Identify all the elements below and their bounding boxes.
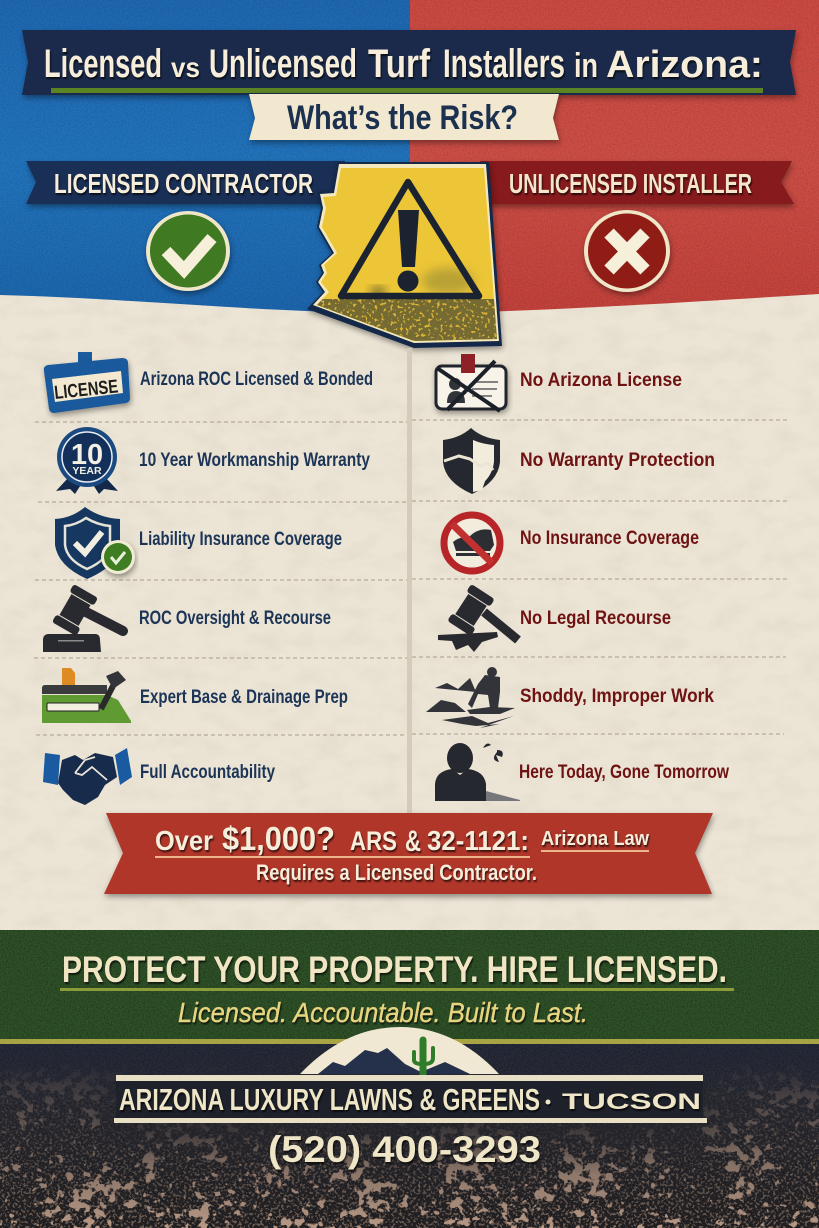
tagline: Licensed. Accountable. Built to Last. <box>178 997 588 1028</box>
icon: Arizona warning state shape <box>300 162 502 348</box>
background: licensed blue half <box>0 0 410 330</box>
row 4 text: ROC Oversight & Recourse <box>139 608 331 629</box>
title banner <box>22 30 796 95</box>
phone number: (520) 400-3293 <box>268 1129 541 1170</box>
icon: turf base preparation <box>42 668 131 723</box>
icon: ten year warranty ribbon <box>56 427 118 494</box>
law ribbon text <box>155 820 649 885</box>
law ribbon <box>104 813 713 894</box>
row 3 text: Liability Insurance Coverage <box>139 529 342 550</box>
row 6 text: Here Today, Gone Tomorrow <box>519 762 729 783</box>
icon: gavel <box>43 584 123 652</box>
icon: license card: LICENSE <box>53 376 119 404</box>
icon: handshake <box>43 748 132 805</box>
call to action green band <box>0 930 819 1040</box>
panel: unlicensed risks <box>426 354 729 801</box>
unlicensed installer banner <box>480 161 794 204</box>
row 1 text: No Arizona License <box>520 370 682 391</box>
company name block <box>114 1075 707 1123</box>
row dividers <box>34 420 790 735</box>
title text: Arizona: <box>606 44 763 86</box>
law ribbon text: Over <box>155 825 213 856</box>
law ribbon text: ARS <box>350 826 397 856</box>
company name: TUCSON <box>562 1089 701 1114</box>
center divider <box>407 348 412 815</box>
warning triangle <box>341 182 479 296</box>
licensed contractor banner <box>26 161 345 204</box>
icon: no insurance sign <box>444 515 500 571</box>
icon: shoddy work scene <box>426 667 515 728</box>
icon: crossed-out license card <box>436 354 506 411</box>
icon: vanishing person <box>435 743 520 801</box>
subtitle ribbon <box>249 94 559 140</box>
law ribbon text: Arizona Law <box>541 828 649 850</box>
logo: dome, mountains and cactus <box>300 1027 499 1076</box>
title text: Turf <box>368 42 431 86</box>
row 5 text: Shoddy, Improper Work <box>520 686 714 707</box>
panel: licensed benefits <box>42 352 373 805</box>
licensed heading: LICENSED CONTRACTOR <box>54 168 313 199</box>
footer asphalt <box>0 1040 819 1228</box>
row 2 text: 10 Year Workmanship Warranty <box>139 450 370 471</box>
icon: insurance shield with check <box>55 507 135 579</box>
icon: green check badge <box>146 211 230 291</box>
law ribbon text: 32-1121: <box>427 825 529 856</box>
title text: Licensed <box>44 42 162 86</box>
row 1 text: Arizona ROC Licensed & Bonded <box>140 369 373 390</box>
title text: Installers <box>443 42 565 86</box>
title text: Unlicensed <box>209 42 357 86</box>
row 2 text: No Warranty Protection <box>520 450 715 471</box>
background: unlicensed red half <box>410 0 819 330</box>
icon: ten year warranty ribbon: 10 <box>71 439 103 471</box>
row 5 text: Expert Base & Drainage Prep <box>140 687 348 708</box>
title text: in <box>574 47 598 85</box>
law ribbon text: $1,000? <box>222 820 335 857</box>
icon: license card <box>44 352 130 413</box>
background: cream paper panel <box>0 294 819 940</box>
law ribbon text: Requires a Licensed Contractor. <box>256 860 537 885</box>
row 6 text: Full Accountability <box>140 762 275 783</box>
row 3 text: No Insurance Coverage <box>520 528 699 549</box>
title text <box>44 42 763 86</box>
title text: vs <box>171 52 200 83</box>
row 4 text: No Legal Recourse <box>520 608 671 629</box>
subtitle text: What’s the Risk? <box>287 99 518 137</box>
paper and colour texture <box>0 0 819 940</box>
gold band line <box>0 1039 819 1044</box>
law ribbon text: & <box>405 825 421 858</box>
icon: red cross badge <box>584 210 670 292</box>
company name: ARIZONA LUXURY LAWNS & GREENS <box>119 1082 540 1117</box>
icon: ten year warranty ribbon: YEAR <box>72 465 102 477</box>
icon: broken gavel <box>438 584 518 652</box>
icon: broken shield <box>443 428 500 494</box>
